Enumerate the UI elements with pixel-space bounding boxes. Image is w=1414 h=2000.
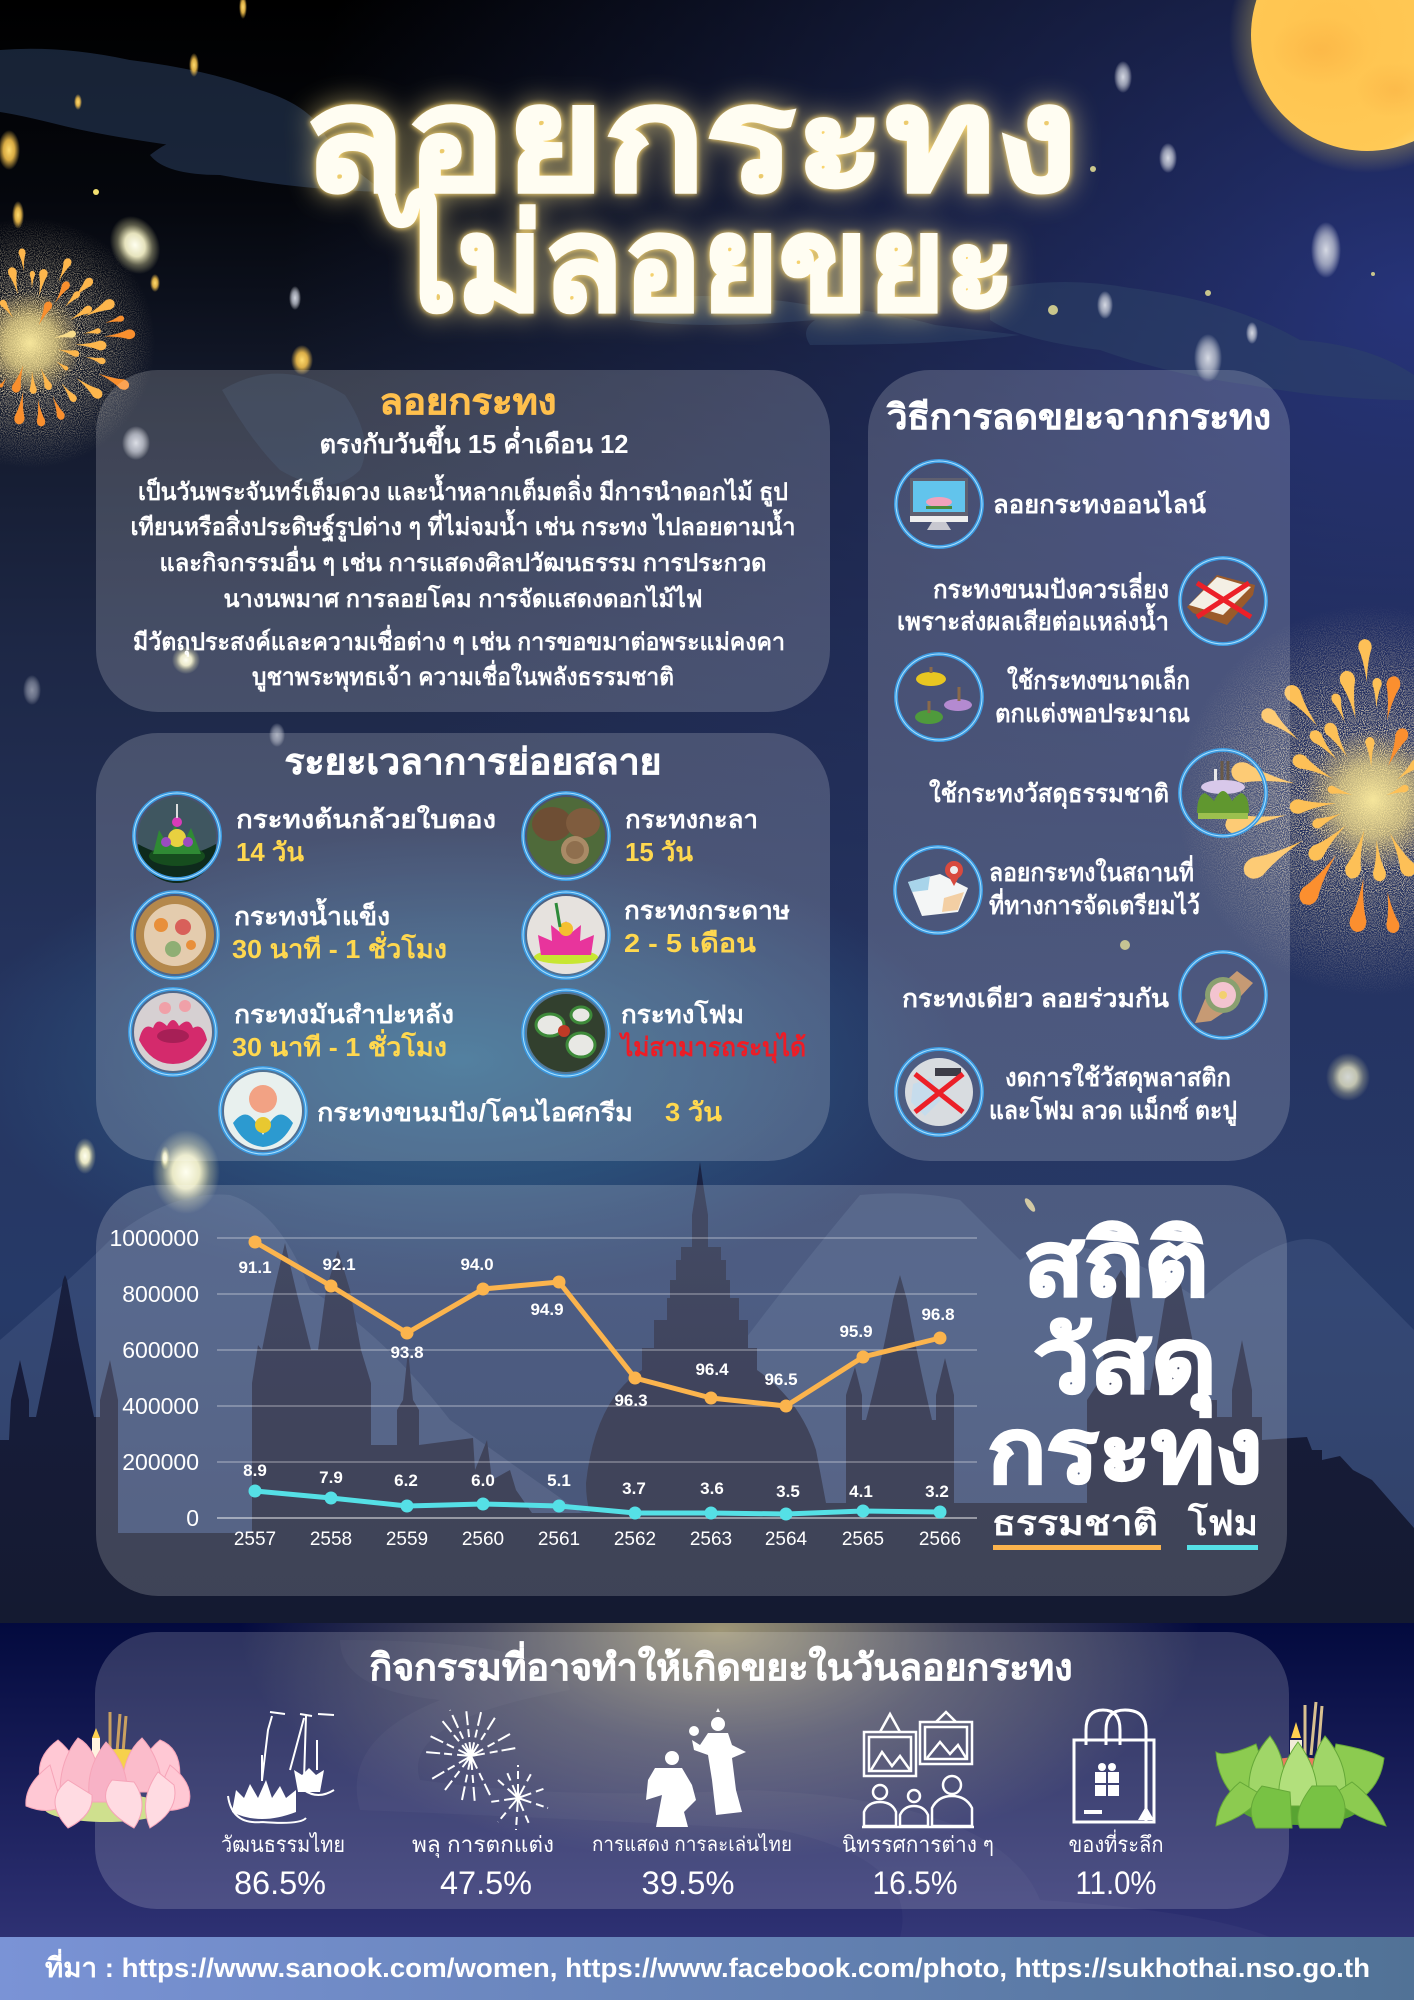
icon: green leaf krathong — [1216, 1702, 1386, 1828]
panel: about Loy Krathong — [96, 370, 830, 712]
series: foam: 6.2 — [394, 1471, 418, 1490]
activity: souvenirs — [1074, 1710, 1154, 1822]
legend: natural: ธรรมชาติ — [992, 1504, 1158, 1543]
x axis labels: 2566 — [919, 1529, 961, 1550]
title: Loy Krathong, no floating waste — [302, 58, 1078, 338]
temple and cathedral silhouette — [0, 1162, 1414, 1640]
tip: avoid plastic and foam: และโฟม ลวด แม็กซ์ ตะปู — [989, 1095, 1237, 1127]
description text: เป็นวันพระจันทร์เต็มดวง และน้ำหลากเต็มตลิ่ง มีการนำดอกไม้ ธูป — [138, 473, 788, 507]
series: natural materials: 93.8 — [390, 1343, 424, 1362]
item: banana krathong 14 days: กระทงต้นกล้วยใบตอง — [236, 804, 496, 834]
panel: decomposition time — [96, 733, 830, 1161]
item: paper krathong — [523, 892, 790, 978]
item: coconut krathong 15 days — [523, 793, 758, 879]
distant hazy mountains — [0, 1193, 1414, 1540]
item: foam krathong: กระทงโฟม — [621, 999, 744, 1029]
item: paper krathong: กระทงกระดาษ — [624, 897, 790, 925]
item: cassava krathong: 30 นาที - 1 ชั่วโมง — [232, 1028, 447, 1062]
title: Loy Krathong, no floating waste: ไม่ลอยขยะ — [379, 189, 1015, 338]
y axis labels: 600000 — [122, 1337, 199, 1363]
activity: Thai culture — [228, 1712, 334, 1823]
bottom band — [0, 1623, 1414, 1937]
x axis labels: 2558 — [310, 1529, 352, 1550]
firework left — [0, 218, 155, 468]
item: ice krathong — [132, 892, 447, 978]
x axis labels: 2563 — [690, 1529, 732, 1550]
series: natural materials: 94.0 — [460, 1255, 494, 1274]
tip: small krathong — [896, 654, 1190, 740]
heading: activities: กิจกรรมที่อาจทำให้เกิดขยะในวันลอยกระทง — [370, 1641, 1072, 1688]
subheading: date: ตรงกับวันขึ้น 15 ค่ำเดือน 12 — [320, 424, 628, 459]
description text: บูชาพระพุทธเจ้า ความเชื่อในพลังธรรมชาติ — [252, 659, 674, 693]
series: natural materials: 91.1 — [238, 1258, 272, 1277]
series: natural materials: 96.5 — [764, 1370, 798, 1389]
series: natural materials: 96.8 — [921, 1305, 955, 1324]
activity: exhibitions — [862, 1712, 974, 1827]
label: souvenirs: 11.0% — [1076, 1865, 1156, 1901]
label: performances — [592, 1833, 792, 1901]
item: bread and ice cream cone krathong: กระทงขนมปัง/โคนไอศกรีม — [317, 1097, 633, 1127]
x axis labels: 2562 — [614, 1529, 656, 1550]
panel: statistics chart — [96, 1185, 1287, 1596]
chart title: สถิติ — [1024, 1215, 1208, 1315]
description text: นางนพมาศ การลอยโคม การจัดแสดงดอกไม้ไฟ — [224, 584, 702, 613]
description text: เทียนหรือสิ่งประดิษฐ์รูปต่าง ๆ ที่ไม่จมน้ำ เช่น กระทง ไปลอยตามน้ำ — [130, 508, 796, 543]
series: natural materials: 96.4 — [695, 1360, 729, 1379]
label: Thai culture: 86.5% — [234, 1865, 326, 1901]
y axis labels: 800000 — [122, 1281, 199, 1307]
y axis labels: 200000 — [122, 1449, 199, 1475]
x axis labels: 2561 — [538, 1529, 580, 1550]
tip: online krathong: ลอยกระทงออนไลน์ — [993, 489, 1206, 519]
title: Loy Krathong, no floating waste: ไม่ลอยขยะ — [379, 189, 1015, 338]
tip: online krathong — [896, 461, 1206, 547]
x axis labels — [234, 1529, 961, 1550]
series: foam: 4.1 — [849, 1482, 873, 1501]
full moon — [1229, 0, 1414, 173]
series: foam: 3.6 — [700, 1479, 724, 1498]
cloud behind first panel — [222, 374, 365, 485]
floating lantern sparks — [0, 0, 1375, 1526]
label: decorations: พลุ การตกแต่ง — [412, 1832, 554, 1858]
x axis labels: 2565 — [842, 1529, 884, 1550]
item: foam krathong: ไม่สามารถระบุได้ — [618, 1031, 806, 1064]
x axis labels: 2557 — [234, 1529, 276, 1550]
series: foam: 7.9 — [319, 1468, 343, 1487]
title: Loy Krathong, no floating waste: ไม่ลอยขยะ — [379, 189, 1015, 338]
label: performances: การแสดง การละเล่นไทย — [592, 1833, 792, 1856]
tip: float at official locations: ที่ทางการจัดเตรียมไว้ — [989, 888, 1200, 920]
x axis labels: 2564 — [765, 1529, 808, 1550]
x axis labels: 2559 — [386, 1529, 428, 1550]
item: coconut krathong 15 days: 15 วัน — [625, 837, 693, 867]
chart title — [988, 1215, 1262, 1502]
label: souvenirs — [1068, 1829, 1164, 1901]
item: cassava krathong: กระทงมันสำปะหลัง — [234, 1001, 454, 1029]
title: Loy Krathong, no floating waste: ลอยกระทง — [302, 58, 1078, 221]
footer: sources — [0, 1937, 1414, 2000]
activity: Thai performance — [646, 1708, 746, 1827]
series: foam: 6.0 — [471, 1471, 495, 1490]
panel: activities causing waste — [95, 1632, 1289, 1909]
tip: float at official locations: ลอยกระทงในสถานที่ — [989, 855, 1194, 887]
series: natural materials: 95.9 — [839, 1322, 873, 1341]
label: decorations: 47.5% — [440, 1865, 532, 1901]
tip: natural materials — [929, 750, 1266, 836]
series: natural materials: 94.9 — [530, 1300, 564, 1319]
series: foam — [243, 1461, 949, 1520]
heading: Loy Krathong: ลอยกระทง — [380, 381, 556, 422]
item: bread and ice cream cone krathong: 3 วัน — [665, 1097, 722, 1127]
label: Thai culture — [221, 1832, 345, 1901]
series: foam: 8.9 — [243, 1461, 267, 1480]
description text: มีวัตถุประสงค์และความเชื่อต่าง ๆ เช่น การขอขมาต่อพระแม่คงคา — [133, 624, 785, 658]
chart title: วัสดุ — [1034, 1312, 1216, 1418]
tip: small krathong: ตกแต่งพอประมาณ — [995, 700, 1190, 728]
y axis labels: 1000000 — [109, 1225, 199, 1251]
item: cassava krathong — [130, 989, 454, 1075]
description text — [130, 473, 796, 693]
x axis labels: 2560 — [462, 1529, 504, 1550]
title: Loy Krathong, no floating waste: ลอยกระทง — [302, 58, 1078, 221]
label: Thai culture: วัฒนธรรมไทย — [221, 1832, 345, 1857]
item: foam krathong — [523, 990, 806, 1076]
chart title: กระทง — [988, 1402, 1262, 1502]
tip: float at official locations — [895, 847, 1200, 933]
y axis labels: 0 — [186, 1505, 199, 1531]
item: ice krathong: 30 นาที - 1 ชั่วโมง — [232, 930, 447, 964]
label: souvenirs: ของที่ระลึก — [1068, 1829, 1164, 1857]
line chart: krathong materials 2557 to 2566 — [109, 1225, 977, 1550]
y axis labels — [109, 1225, 199, 1531]
title: Loy Krathong, no floating waste: ลอยกระทง — [302, 58, 1078, 221]
series: foam: 3.2 — [925, 1482, 949, 1501]
tip: avoid plastic and foam — [896, 1049, 1237, 1135]
tip: avoid bread krathong: กระทงขนมปังควรเลี่ยง — [933, 572, 1169, 604]
y axis labels: 400000 — [122, 1393, 199, 1419]
tip: share one krathong: กระทงเดียว ลอยร่วมกัน — [902, 985, 1169, 1013]
panel: ways to reduce waste — [868, 370, 1290, 1161]
drifting clouds — [0, 49, 1414, 400]
description text: และกิจกรรมอื่น ๆ เช่น การแสดงศิลปวัฒนธรรม การประกวด — [160, 545, 766, 577]
series: natural materials: 92.1 — [322, 1255, 356, 1274]
tip: avoid bread krathong: เพราะส่งผลเสียต่อแหล่งน้ำ — [897, 602, 1169, 636]
series: foam: 3.5 — [776, 1482, 800, 1501]
item: banana krathong 14 days: 14 วัน — [236, 837, 304, 867]
series: foam: 5.1 — [547, 1471, 571, 1490]
activity: decorative fireworks — [425, 1708, 548, 1830]
firework right — [1178, 605, 1414, 995]
series: natural materials — [238, 1236, 955, 1412]
tip: small krathong: ใช้กระทงขนาดเล็ก — [1007, 665, 1190, 695]
label: exhibitions: นิทรรศการต่าง ๆ — [842, 1832, 994, 1857]
label: exhibitions: 16.5% — [872, 1865, 958, 1901]
series: foam: 3.7 — [622, 1479, 646, 1498]
label: decorations — [412, 1832, 554, 1901]
icon: pink lotus krathong — [26, 1712, 190, 1828]
item: banana krathong 14 days — [134, 793, 496, 883]
label: exhibitions — [842, 1832, 994, 1901]
series: natural materials: 96.3 — [614, 1391, 648, 1410]
label: performances: 39.5% — [642, 1865, 734, 1901]
heading: ways to reduce waste: วิธีการลดขยะจากกระทง — [886, 398, 1271, 437]
tip: natural materials: ใช้กระทงวัสดุธรรมชาติ — [929, 778, 1169, 810]
item: bread and ice cream cone krathong — [220, 1068, 722, 1154]
item: ice krathong: กระทงน้ำแข็ง — [234, 897, 390, 931]
tip: avoid plastic and foam: งดการใช้วัสดุพลาสติก — [1005, 1062, 1231, 1094]
legend: foam: โฟม — [1187, 1502, 1258, 1543]
footer: sources: ที่มา : https://www.sanook.com/women, https://www.facebook.com/photo, https://sukhothai.nso.go.th — [45, 1948, 1370, 1983]
heading: decomposition time: ระยะเวลาการย่อยสลาย — [284, 741, 662, 782]
item: paper krathong: 2 - 5 เดือน — [624, 928, 756, 958]
tip: avoid bread krathong — [897, 558, 1266, 644]
item: coconut krathong 15 days: กระทงกะลา — [625, 806, 758, 834]
tip: share one krathong — [902, 952, 1266, 1038]
